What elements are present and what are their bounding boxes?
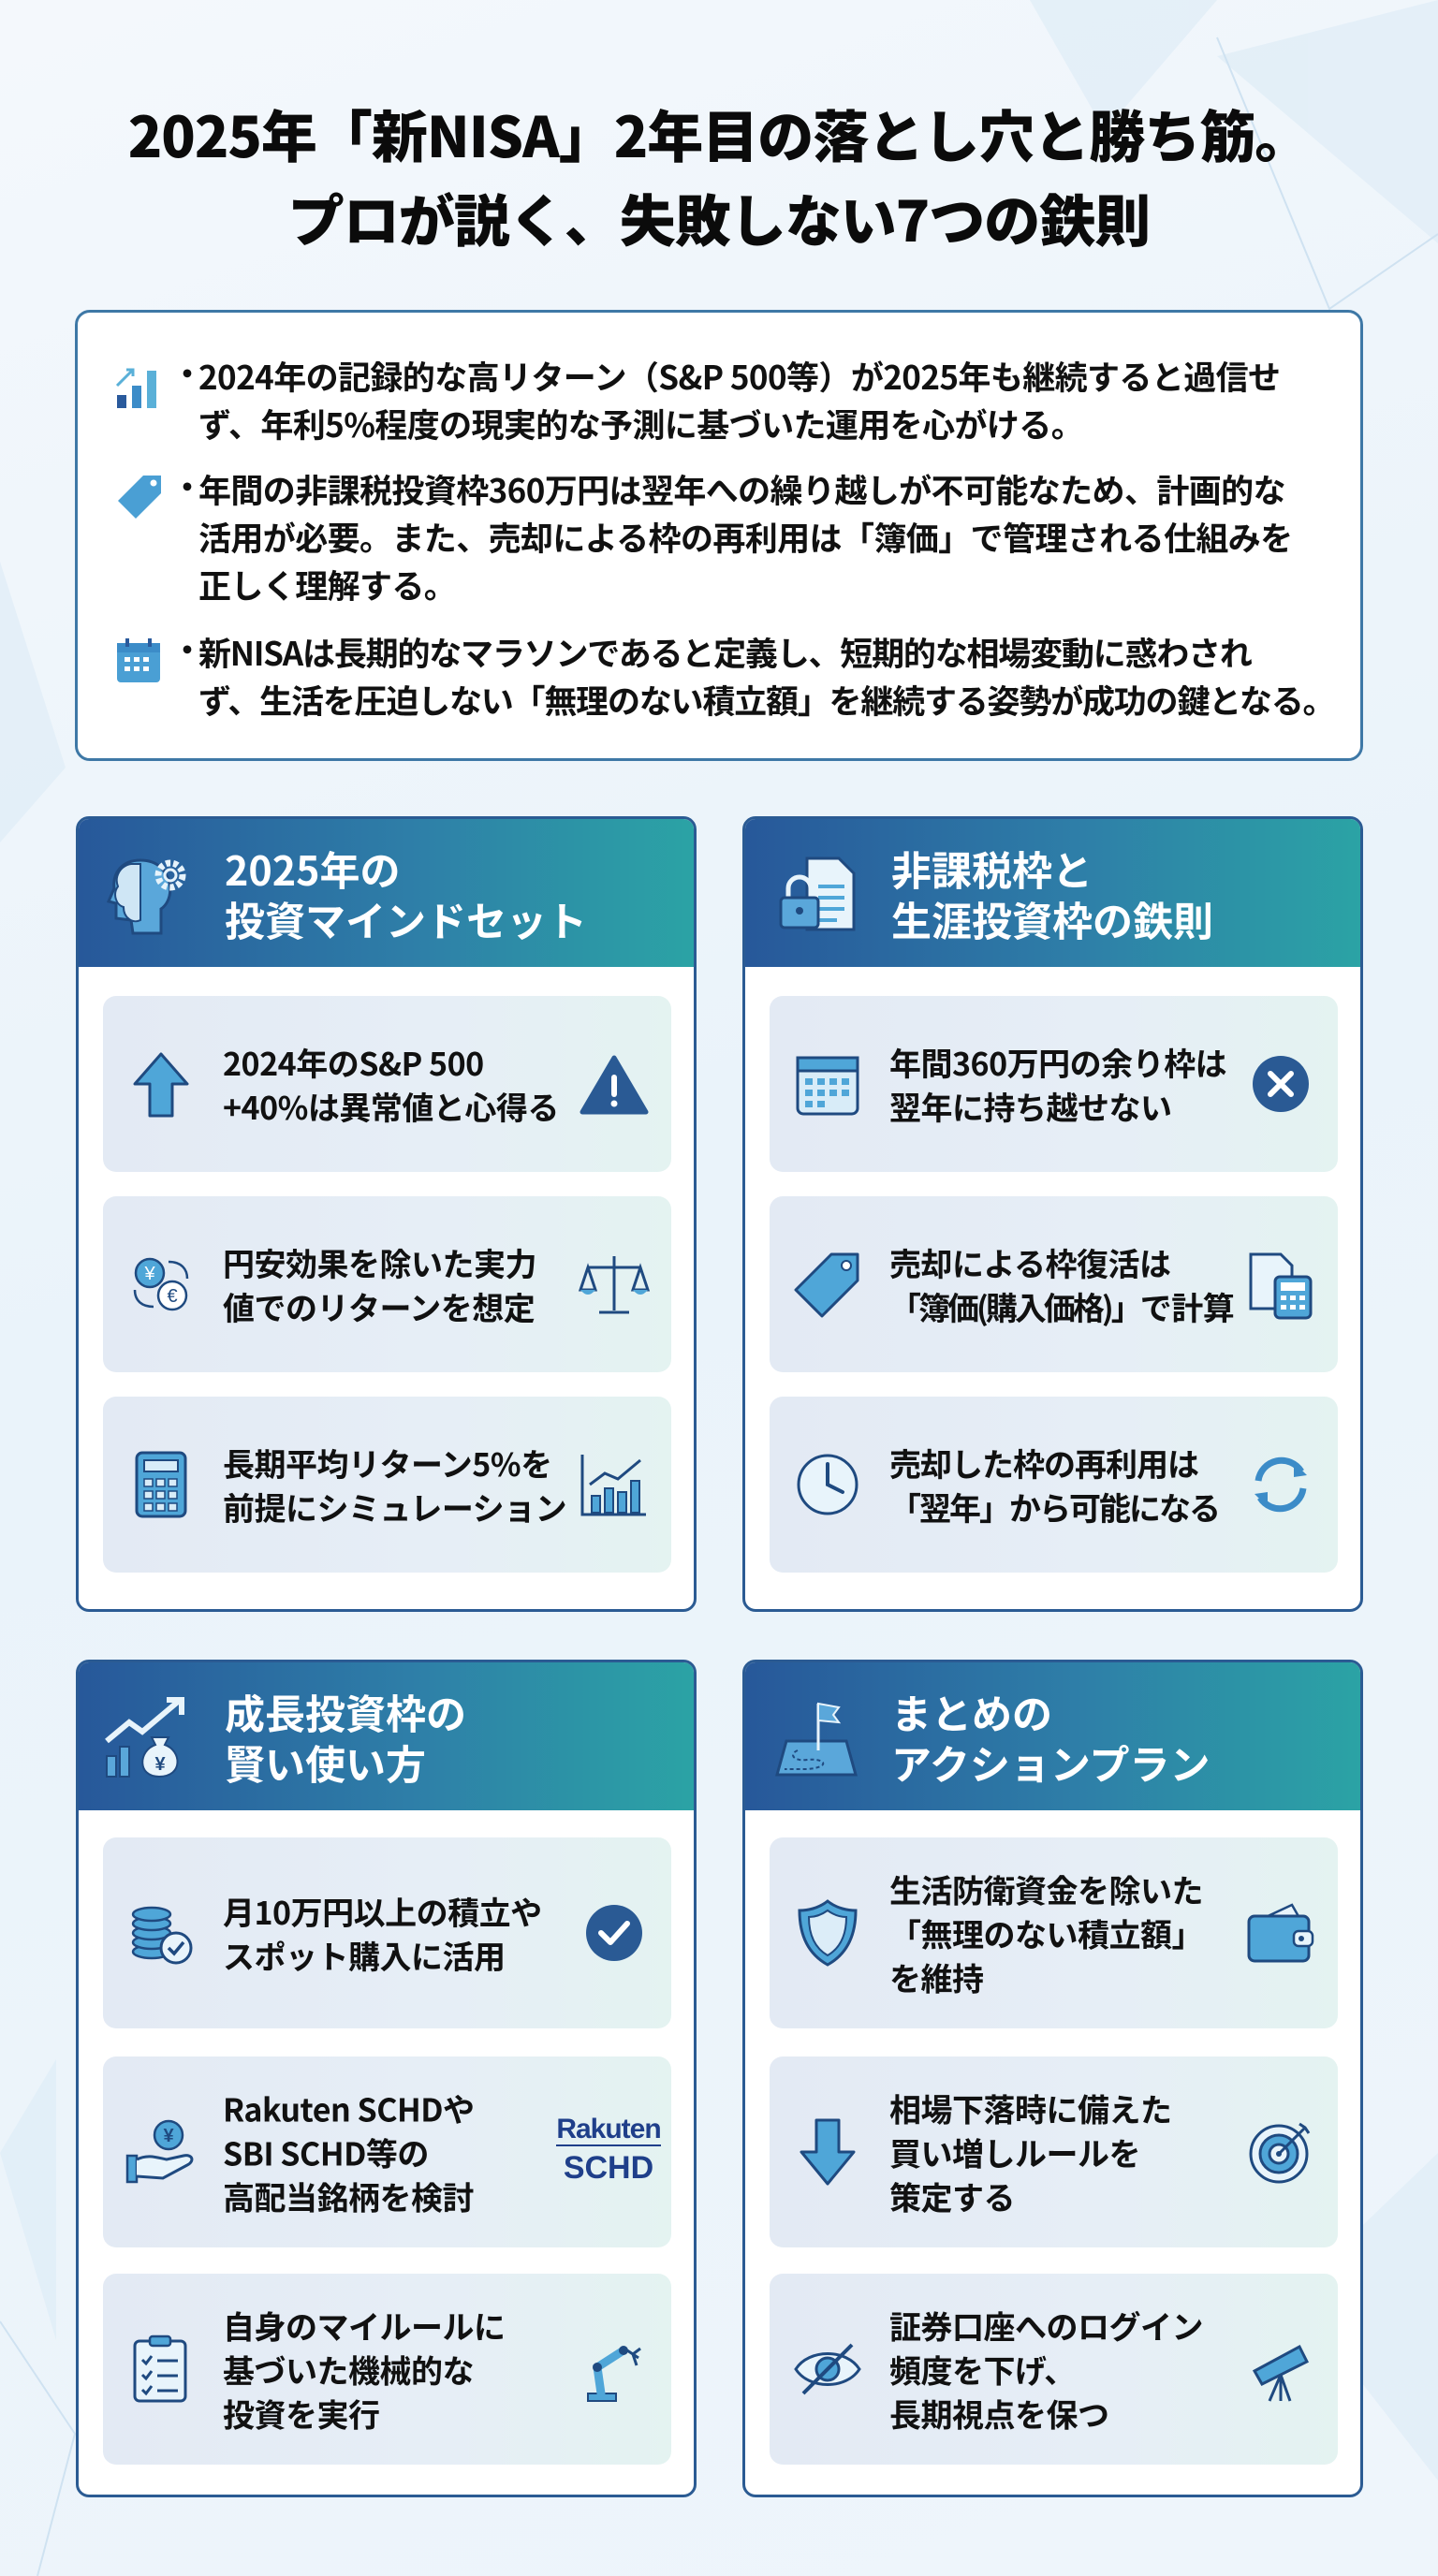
summary item 2: 年間の非課税投資枠360万円は翌年への繰り越しが不可能なため、計画的な: [198, 465, 1285, 513]
icon: x circle: [1253, 1056, 1309, 1112]
icon: clock: [798, 1455, 858, 1515]
card: my rules: 自身のマイルールに: [223, 2303, 506, 2348]
logo: Rakuten SCHD: SCHD: [564, 2150, 653, 2186]
header: tax-free: [745, 819, 1360, 967]
icon: robot arm: [587, 2346, 641, 2402]
icon: hand yen: ¥: [163, 2126, 174, 2146]
header: action plan: まとめの: [891, 1683, 1052, 1741]
icon: bar chart: [116, 369, 156, 408]
header: mindset: 2025年の: [225, 840, 400, 898]
card: yen effect: [103, 1196, 671, 1372]
icon: refresh: [1255, 1456, 1307, 1513]
summary item 2: [118, 465, 1293, 608]
panel: summary: [75, 310, 1363, 761]
icon: clipboard: [133, 2334, 187, 2402]
header: growth: [79, 1662, 694, 1810]
icon: growth chart: [580, 1455, 646, 1516]
icon: check circle: [586, 1905, 642, 1961]
icon: tag: [794, 1252, 859, 1318]
panel: growth investment: [76, 1660, 697, 2497]
summary item 2: ・: [171, 471, 203, 506]
icon: growth money bag: ¥: [154, 1754, 166, 1775]
card: 3.6M carryover: [770, 996, 1338, 1172]
icon: currency exchange: €: [167, 1286, 178, 1307]
card: 5% simulation: 前提にシミュレーション: [223, 1484, 566, 1530]
icon: lock document: [779, 857, 856, 930]
card: buy-more rule: 相場下落時に備えた: [889, 2086, 1172, 2130]
card: my rules: 基づいた機械的な: [223, 2346, 474, 2393]
icon: warning: [580, 1056, 648, 1114]
summary item 1: ・: [171, 358, 203, 393]
card: fewer logins: 証券口座へのログイン: [889, 2303, 1203, 2348]
card: living funds: を維持: [889, 1954, 983, 1999]
card: reuse next year: [770, 1397, 1338, 1573]
card: book value: 「簿価(購入価格)」で計算: [889, 1283, 1234, 1329]
icon: shield: [798, 1899, 858, 1967]
icon: growth money bag: [105, 1697, 184, 1778]
icon: calendar: [117, 638, 160, 682]
icon: calculator: [135, 1451, 187, 1518]
summary item 1: ず、年利5%程度の現実的な予測に基づいた運用を心がける。: [198, 400, 1083, 447]
card: SCHD: Rakuten SCHDや: [223, 2086, 475, 2130]
card: book value: 売却による枠復活は: [889, 1239, 1170, 1285]
icon: eye slash: [794, 2344, 861, 2394]
summary item 2: 正しく理解する。: [198, 561, 456, 608]
icon: currency exchange: [133, 1258, 189, 1310]
card: SCHD: SBI SCHD等の: [223, 2129, 429, 2175]
title: [128, 93, 1310, 258]
card: buy-more rule: 買い増しルールを: [889, 2129, 1140, 2175]
icon: brain gear: [107, 859, 185, 934]
header: tax-free: 生涯投資枠の鉄則: [891, 890, 1213, 948]
card: 5% simulation: 長期平均リターン5%を: [223, 1440, 552, 1486]
card: S&P 500: 2024年のS&P 500: [223, 1039, 484, 1085]
header: mindset: 投資マインドセット: [225, 890, 587, 948]
card: my rules: [103, 2274, 671, 2465]
icon: telescope: [1253, 2345, 1309, 2402]
card: book value: [770, 1196, 1338, 1372]
header: growth: 賢い使い方: [225, 1734, 426, 1792]
icon: calendar: [796, 1056, 859, 1116]
icon: up arrow: [133, 1052, 189, 1118]
summary item 3: 新NISAは長期的なマラソンであると定義し、短期的な相場変動に惑わされ: [198, 628, 1252, 676]
icon: tag: [118, 476, 161, 519]
card: monthly 100k: 月10万円以上の積立や: [223, 1888, 542, 1934]
summary item 1: 2024年の記録的な高リターン（S&P 500等）が2025年も継続すると過信せ: [198, 352, 1280, 400]
card: SCHD: [103, 2056, 671, 2247]
header: mindset: [79, 819, 694, 967]
icon: down arrow: [800, 2119, 856, 2186]
icon: coins check: [131, 1906, 193, 1964]
card: living funds: 生活防衛資金を除いた: [889, 1866, 1203, 1911]
card: 3.6M carryover: 翌年に持ち越せない: [889, 1083, 1172, 1129]
card: fewer logins: 長期視点を保つ: [889, 2391, 1108, 2436]
panel: action plan: [742, 1660, 1363, 2497]
title: 2025年「新NISA」2年目の落とし穴と勝ち筋。: [128, 93, 1310, 174]
card: SCHD: 高配当銘柄を検討: [223, 2174, 474, 2218]
header: action plan: [745, 1662, 1360, 1810]
card: living funds: [770, 1837, 1338, 2028]
icon: wallet: [1247, 1903, 1314, 1962]
card: S&P 500: +40%は異常値と心得る: [223, 1083, 559, 1129]
header: growth: 成長投資枠の: [225, 1683, 466, 1741]
icon: currency exchange: ¥: [143, 1264, 155, 1284]
icon: map flag: [775, 1702, 858, 1777]
card: S&P 500: [103, 996, 671, 1172]
card: yen effect: 円安効果を除いた実力: [223, 1239, 536, 1285]
header: tax-free: 非課税枠と: [891, 840, 1093, 898]
card: yen effect: 値でのリターンを想定: [223, 1283, 535, 1329]
summary item 2: 活用が必要。また、売却による枠の再利用は「簿価」で管理される仕組みを: [198, 513, 1293, 561]
card: reuse next year: 売却した枠の再利用は: [889, 1440, 1198, 1486]
card: monthly 100k: [103, 1837, 671, 2028]
title: プロが説く、失敗しない7つの鉄則: [288, 177, 1150, 258]
summary item 3: [117, 628, 1334, 724]
card: buy-more rule: 策定する: [889, 2174, 1015, 2218]
panel: tax-free limits: [742, 816, 1363, 1612]
summary item 3: ・: [171, 634, 203, 669]
logo: Rakuten SCHD: [556, 2114, 661, 2186]
card: reuse next year: 「翌年」から可能になる: [889, 1484, 1219, 1530]
card: fewer logins: 頻度を下げ、: [889, 2346, 1076, 2393]
card: 5% simulation: [103, 1397, 671, 1573]
summary item 3: ず、生活を圧迫しない「無理のない積立額」を継続する姿勢が成功の鍵となる。: [198, 676, 1334, 724]
icon: hand yen: [125, 2119, 193, 2183]
card: buy-more rule: [770, 2056, 1338, 2247]
card: monthly 100k: スポット購入に活用: [223, 1932, 506, 1978]
card: my rules: 投資を実行: [223, 2391, 380, 2436]
panel: mindset: [76, 816, 697, 1612]
card: fewer logins: [770, 2274, 1338, 2465]
icon: calculator document: [1249, 1252, 1313, 1320]
card: 3.6M carryover: 年間360万円の余り枠は: [889, 1039, 1226, 1085]
summary item 1: [116, 352, 1280, 447]
icon: target: [1249, 2123, 1311, 2183]
header: action plan: アクションプラン: [891, 1734, 1211, 1792]
icon: scales: [579, 1256, 650, 1314]
logo: Rakuten SCHD: Rakuten: [556, 2114, 661, 2144]
card: living funds: 「無理のない積立額」: [889, 1910, 1203, 1956]
